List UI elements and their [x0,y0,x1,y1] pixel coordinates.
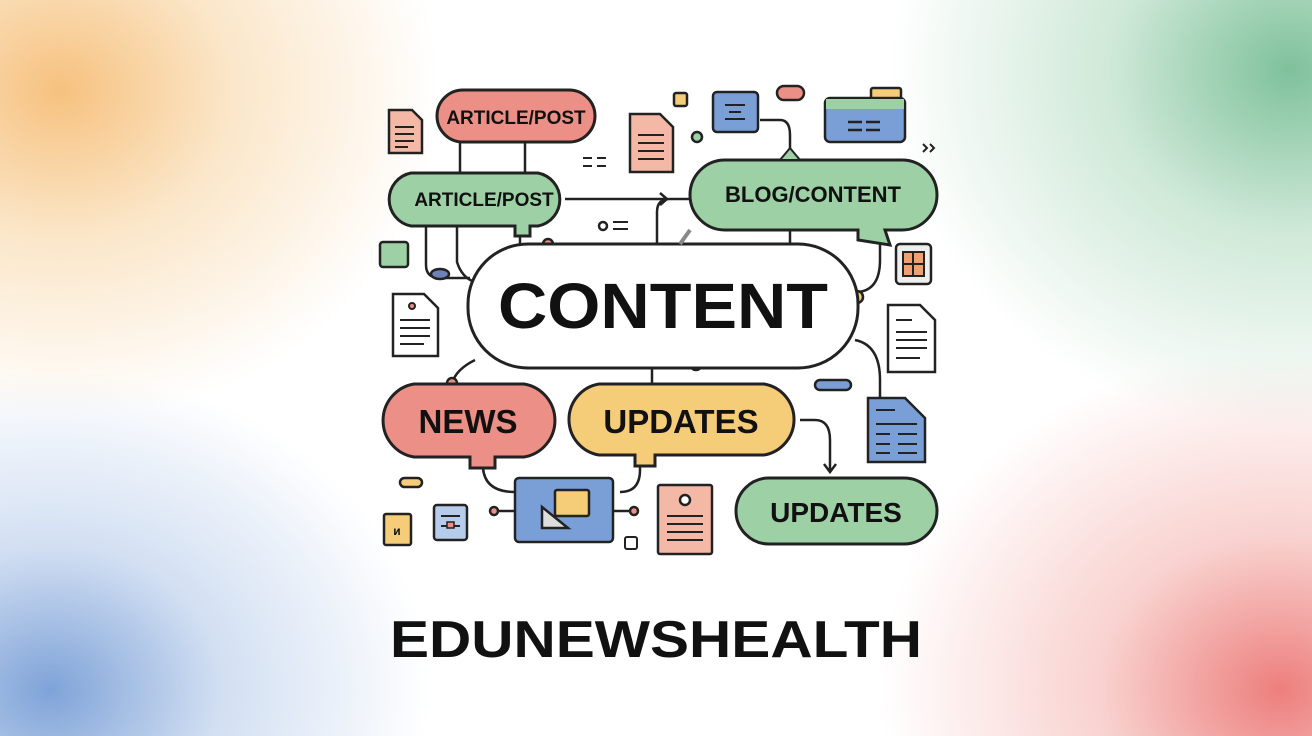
pill: article/post green [389,173,560,236]
pill: updates yellow: UPDATES [603,403,759,440]
central pill: CONTENT: CONTENT [498,270,828,342]
icons: bottom-left small [384,478,637,549]
pill: article/post red: ARTICLE/POST [446,108,586,129]
pill: blog/content [690,148,937,245]
small dots [431,132,863,515]
pill: news [383,384,555,468]
icon: blue doc [815,380,925,462]
pill: article/post green: ARTICLE/POST [414,190,554,211]
small decorative glyphs [583,86,934,244]
pill: news: NEWS [418,403,518,440]
icon: blue image card [515,478,613,542]
icon: blue box top [713,92,758,132]
icon: doc left [393,294,438,356]
pill: blog/content: BLOG/CONTENT [725,182,902,207]
connector lines [426,120,880,511]
icon: doc pink middle [630,114,673,172]
icon: pink doc bottom [658,485,712,554]
central pill: CONTENT [468,244,858,368]
icon: browser folder [825,88,905,142]
brand title: EDU NEWSHEALTH [390,611,922,669]
icon: green square [380,242,408,267]
icons: bottom-left small: и [393,524,401,538]
pill: article/post red [437,90,595,142]
pill: updates green [736,478,937,544]
icon: doc top-left [389,110,422,153]
pill: updates green: UPDATES [770,497,902,528]
icon: doc right [888,305,935,372]
pill: updates yellow [569,384,794,466]
icon: grid tile right [896,244,931,284]
